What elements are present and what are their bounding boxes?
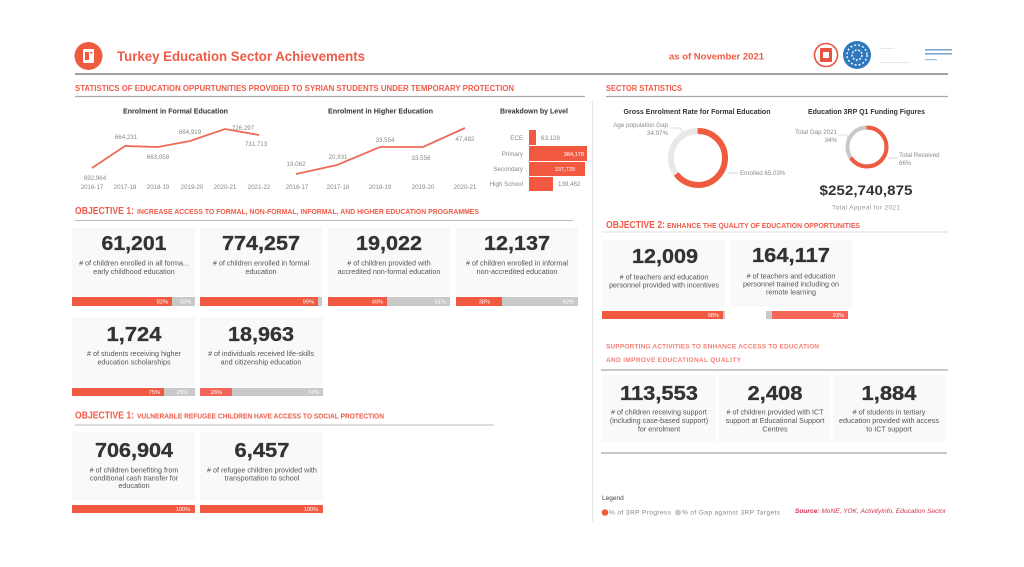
line chart: enrolment in formal education: 684,919 (179, 129, 202, 136)
legend (602, 495, 781, 516)
stat card: 61,201 (72, 228, 195, 306)
line chart: enrolment in formal education: 664,231 (115, 134, 138, 141)
donut: funding figures: 34% (825, 137, 837, 144)
heading: statistics: STATISTICS OF EDUCATION OPPURTUNITIES PROVIDED TO SYRIAN STUDENTS UNDER TEMPORARY PROTECTION (75, 84, 514, 93)
stat card: 706,904: education (118, 481, 150, 490)
bar chart: breakdown by level: 63,128 (541, 135, 560, 142)
stat card: 6,457: transportation to school (225, 474, 300, 482)
stat card: 2,408: # of children provided with ICT (726, 408, 824, 416)
bar chart: breakdown by level: ECE (510, 135, 523, 142)
heading: objective 2: OBJECTIVE 2: (606, 219, 665, 231)
legend: Legend (602, 495, 624, 502)
stat card: 774,257: # of children enrolled in formal (213, 258, 310, 268)
heading: objective 1 social protection (75, 410, 384, 422)
stat card: 1,724 (72, 317, 195, 396)
stat card: 18,963: 74% (308, 390, 319, 396)
stat card: 1,884: 1,884 (862, 383, 917, 405)
stat card: 1,724: # of students receiving higher (87, 349, 182, 358)
donut: gross enrolment rate: Gross Enrolment Rate for Formal Education (624, 109, 770, 116)
line chart: enrolment in formal education: 2017-18 (114, 184, 137, 191)
line chart: enrolment in formal education: 2018-19 (147, 184, 170, 191)
donut: funding figures: Total Received (899, 152, 940, 159)
legend: % of 3RP Progress (609, 510, 672, 516)
line chart: enrolment in formal education: 2020-21 (214, 184, 237, 191)
stat card: 2,408: 2,408 (748, 383, 802, 405)
bar chart: breakdown by level: Breakdown by Level (500, 108, 568, 116)
donut: funding figures: 66% (899, 160, 912, 167)
bar chart: breakdown by level (490, 108, 587, 191)
line chart: enrolment in higher education (286, 108, 477, 191)
stat card: 6,457: 100% (304, 507, 318, 513)
stat card: 12,009: # of teachers and education (620, 272, 708, 282)
line chart: enrolment in higher education: 2017-18 (327, 184, 350, 191)
donut: gross enrolment rate: Enrolled 65.03% (740, 170, 786, 177)
bar chart: breakdown by level: 337,739 (555, 167, 575, 173)
stat card: 113,553: # of children receiving support (611, 408, 707, 416)
stat card: 12,137 (456, 228, 578, 306)
line chart: enrolment in formal education: 692,964 (84, 175, 107, 182)
line chart: enrolment in higher education: 19,062 (287, 161, 306, 168)
line chart: enrolment in formal education: Enrolment in Formal Education (123, 108, 228, 116)
heading: supporting activities: AND IMPROVE EDUCATIONAL QUALITY (606, 357, 742, 364)
line chart: enrolment in higher education: 33,554 (376, 137, 395, 144)
line chart: enrolment in formal education: 663,058 (147, 154, 170, 161)
stat card: 164,117: remote learning (766, 288, 816, 296)
source note: Source: MoNE, YOK, ActivityInfo, Education Sector (795, 508, 947, 515)
heading: objective 1 access: OBJECTIVE 1: (75, 205, 134, 217)
stat card: 164,117: 164,117 (752, 245, 830, 267)
stat card: 2,408: Centres (762, 424, 788, 434)
stat card: 12,137: non-accredited education (477, 267, 557, 276)
stat card: 18,963: 18,963 (228, 324, 294, 346)
stat card: 19,022 (328, 228, 450, 306)
stat card: 61,201: 18% (180, 300, 191, 306)
stat card: 19,022: accredited non-formal education (338, 267, 440, 276)
icon: education sector badge (74, 42, 102, 70)
line chart: enrolment in higher education: 33,556 (412, 155, 431, 162)
title: Turkey Education Sector Achievements (117, 49, 365, 64)
stat card: 774,257 (200, 228, 322, 306)
donut: funding figures: Total Gap 2021 (795, 129, 838, 136)
heading: supporting activities: SUPPORTING ACTIVITIES TO ENHANCE ACCESS TO EDUCATION (606, 344, 819, 350)
stat card: 19,022: 51% (435, 300, 446, 306)
stat card: 113,553: (including case-based support) (610, 416, 708, 425)
bar chart: breakdown by level: 384,178 (564, 152, 584, 158)
stat card: 164,117 (730, 240, 852, 319)
line chart: enrolment in higher education: 20,931 (329, 154, 348, 161)
heading: supporting activities (606, 344, 819, 364)
stat card: 12,137: 12,137 (484, 233, 550, 255)
donut: gross enrolment rate: 34.97% (647, 130, 668, 137)
stat card: 706,904: 706,904 (95, 440, 174, 462)
line chart: enrolment in formal education: 731,713 (245, 141, 268, 148)
logos: sector and UN partners (814, 41, 952, 69)
heading: sector statistics: SECTOR STATISTICS (606, 84, 683, 93)
stat card: 18,963: and citizenship education (221, 358, 301, 366)
stat card: 61,201: 61,201 (102, 233, 166, 255)
donut: gross enrolment rate (613, 109, 786, 185)
stat card: 1,724: education scholarships (97, 358, 171, 366)
line chart: enrolment in formal education: 2019-20 (181, 184, 204, 191)
stat card: 2,408 (719, 375, 830, 442)
funding total (820, 182, 913, 212)
stat card: 164,117: 93% (833, 313, 844, 319)
line chart: enrolment in higher education: 2020-21 (454, 184, 477, 191)
stat card: 61,201: 82% (157, 300, 168, 306)
heading: objective 2 (606, 219, 860, 231)
heading: objective 2: ENHANCE THE QUALITY OF EDUCATION OPPORTUNITIES (667, 223, 860, 230)
line chart: enrolment in higher education: 2019-20 (412, 184, 435, 191)
stat card: 19,022: # of children provided with (347, 258, 431, 268)
funding total: Total Appeal for 2021 (832, 204, 900, 212)
line chart: enrolment in formal education: 2021-22 (248, 184, 271, 191)
stat card: 706,904: 100% (176, 507, 190, 513)
stat card: 1,884 (833, 375, 946, 442)
stat card: 1,724: 75% (149, 390, 160, 396)
heading: objective 1 social protection: VULNERABLE REFUGEE CHILDREN HAVE ACCESS TO SOCIAL PROTECTION (137, 414, 384, 420)
line chart: enrolment in higher education: 47,482 (456, 136, 475, 143)
stat card: 1,884: to ICT support (866, 424, 912, 434)
donut: gross enrolment rate: Age population Gap (613, 122, 669, 129)
legend: % of Gap against 3RP Targets (682, 510, 781, 516)
stat card: 774,257: education (245, 267, 277, 276)
stat card: 113,553 (602, 375, 716, 442)
stat card: 12,009: 98% (708, 313, 719, 319)
stat card: 6,457 (200, 432, 323, 513)
stat card: 61,201: early childhood education (93, 267, 175, 276)
heading: objective 1 social protection: OBJECTIVE 1: (75, 410, 134, 422)
stat card: 113,553: 113,553 (620, 383, 698, 405)
donut: funding figures (795, 109, 940, 167)
stat card: 1,724: 25% (177, 390, 188, 396)
heading: objective 1 access: INCREASE ACCESS TO FORMAL, NON-FORMAL, INFORMAL, AND HIGHER EDUCATION PROGRAMMES (137, 209, 479, 216)
line chart: enrolment in formal education (81, 108, 271, 191)
bar chart: breakdown by level: Primary (502, 151, 524, 158)
stat card: 1,884: # of students in tertiary (853, 408, 926, 416)
funding total: $252,740,875 (820, 182, 913, 198)
stat card: 164,117: # of teachers and education (747, 272, 835, 280)
stat card: 19,022: 19,022 (356, 233, 422, 255)
line chart: enrolment in higher education: 2016-17 (286, 184, 309, 191)
stat card: 113,553: for enrolment (638, 424, 680, 434)
stat card: 164,117: personnel trained including on (743, 280, 839, 288)
stat card: 12,009: 12,009 (632, 246, 698, 268)
line chart: enrolment in formal education: 726,297 (232, 125, 255, 132)
donut: funding figures: Education 3RP Q1 Funding Figures (808, 109, 925, 116)
stat card: 12,137: # of children enrolled in informal (466, 258, 568, 268)
stat card: 2,408: support at Educational Support (726, 416, 824, 425)
stat card: 6,457: # of refugee children provided with (207, 466, 317, 474)
stat card: 18,963: # of individuals received life-skills (208, 349, 314, 358)
stat card: 774,257: 99% (303, 300, 314, 306)
bar chart: breakdown by level: 139,462 (558, 181, 581, 188)
line chart: enrolment in higher education: Enrolment in Higher Education (328, 108, 433, 116)
stat card: 706,904 (72, 432, 195, 513)
stat card: 12,137: 38% (479, 300, 490, 306)
date label: as of November 2021 (669, 52, 765, 62)
heading: objective 1 access (75, 205, 479, 217)
bar chart: breakdown by level: Secondary (493, 166, 524, 173)
stat card: 6,457: 6,457 (234, 440, 290, 462)
stat card: 774,257: 774,257 (222, 233, 300, 255)
stat card: 19,022: 49% (372, 300, 383, 306)
stat card: 18,963 (200, 317, 323, 396)
line chart: enrolment in formal education: 2016-17 (81, 184, 104, 191)
bar chart: breakdown by level: High School (490, 181, 523, 188)
line chart: enrolment in higher education: 2018-19 (369, 184, 392, 191)
stat card: 1,724: 1,724 (106, 324, 162, 346)
stat card: 12,009 (602, 240, 725, 319)
stat card: 12,137: 62% (563, 300, 574, 306)
stat card: 706,904: conditional cash transfer for (90, 474, 179, 482)
stat card: 61,201: # of children enrolled in all forma... (79, 258, 189, 268)
stat card: 1,884: education provided with access (839, 416, 939, 425)
stat card: 18,963: 26% (211, 390, 222, 396)
stat card: 706,904: # of children benefiting from (90, 466, 178, 474)
stat card: 12,009: personnel provided with incentives (609, 280, 719, 290)
